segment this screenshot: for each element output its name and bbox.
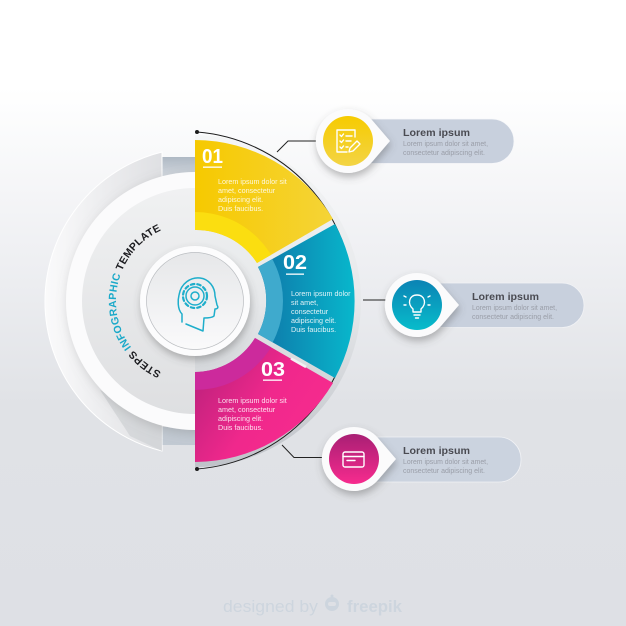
panel: step 03 magenta sector <box>195 338 333 462</box>
step 02 text: Lorem ipsum dolor <box>291 289 351 298</box>
icon: light bulb <box>404 295 430 318</box>
description 02: Lorem ipsum dolor sit amet, <box>472 303 557 312</box>
description 03: Lorem ipsum dolor sit amet, <box>403 457 488 466</box>
title 03: Lorem ipsum <box>403 445 470 457</box>
pill 03 <box>352 437 521 482</box>
icon: freepik logo <box>325 594 339 611</box>
connector: step 01 <box>277 141 320 152</box>
connector: step 02 <box>363 299 390 301</box>
number 02: 02 <box>283 252 307 274</box>
description 03: consectetur adipiscing elit. <box>403 466 485 475</box>
watermark: designed by <box>223 598 319 616</box>
step 03 text: amet, consectetur <box>218 405 276 414</box>
step 03 text: Lorem ipsum dolor sit <box>218 396 287 405</box>
icon: head with gear <box>178 278 218 331</box>
outer black arc <box>195 130 353 471</box>
panel: back crescent shell <box>45 152 196 451</box>
circular heading: STEPS INFOGRAPHIC TEMPLATE <box>108 224 161 378</box>
callout: step 01 <box>316 109 514 173</box>
step 01 text: Duis faucibus. <box>218 204 263 213</box>
pill 02 <box>415 283 584 328</box>
number 03: 03 <box>261 359 285 381</box>
callout: step 02 <box>385 273 584 337</box>
watermark: freepik <box>347 597 403 616</box>
callout: step 03 <box>322 427 521 491</box>
step 03 text: Duis faucibus. <box>218 423 263 432</box>
sector halo <box>195 135 361 467</box>
title 01: Lorem ipsum <box>403 127 470 139</box>
panel: main disc <box>66 172 324 430</box>
panel: step 02 blue sector <box>258 224 355 378</box>
connector: step 03 <box>282 445 326 458</box>
number 01: 01 <box>202 146 223 168</box>
center hub <box>140 246 250 356</box>
bubble 03 <box>322 427 396 491</box>
step 01 text: adipiscing elit. <box>218 195 263 204</box>
step 03 text: adipiscing elit. <box>218 414 263 423</box>
bubble 02 <box>385 273 459 337</box>
bubble 01 <box>316 109 390 173</box>
step 02 text: consectetur <box>291 307 329 316</box>
panel: step 01 yellow sector <box>195 140 333 263</box>
description 01: consectetur adipiscing elit. <box>403 148 485 157</box>
icon: checklist <box>337 130 360 152</box>
step 02 text: adipiscing elit. <box>291 316 336 325</box>
title 02: Lorem ipsum <box>472 291 539 303</box>
step 02 text: sit amet, <box>291 298 318 307</box>
step 01 text: Lorem ipsum dolor sit <box>218 177 287 186</box>
description 02: consectetur adipiscing elit. <box>472 312 554 321</box>
icon: card <box>343 452 364 467</box>
step 02 text: Duis faucibus. <box>291 325 336 334</box>
step 01 text: amet, consectetur <box>218 186 276 195</box>
watermark <box>223 594 403 616</box>
description 01: Lorem ipsum dolor sit amet, <box>403 139 488 148</box>
gap highlight between blue and magenta <box>291 358 306 367</box>
pill 01 <box>345 119 514 164</box>
